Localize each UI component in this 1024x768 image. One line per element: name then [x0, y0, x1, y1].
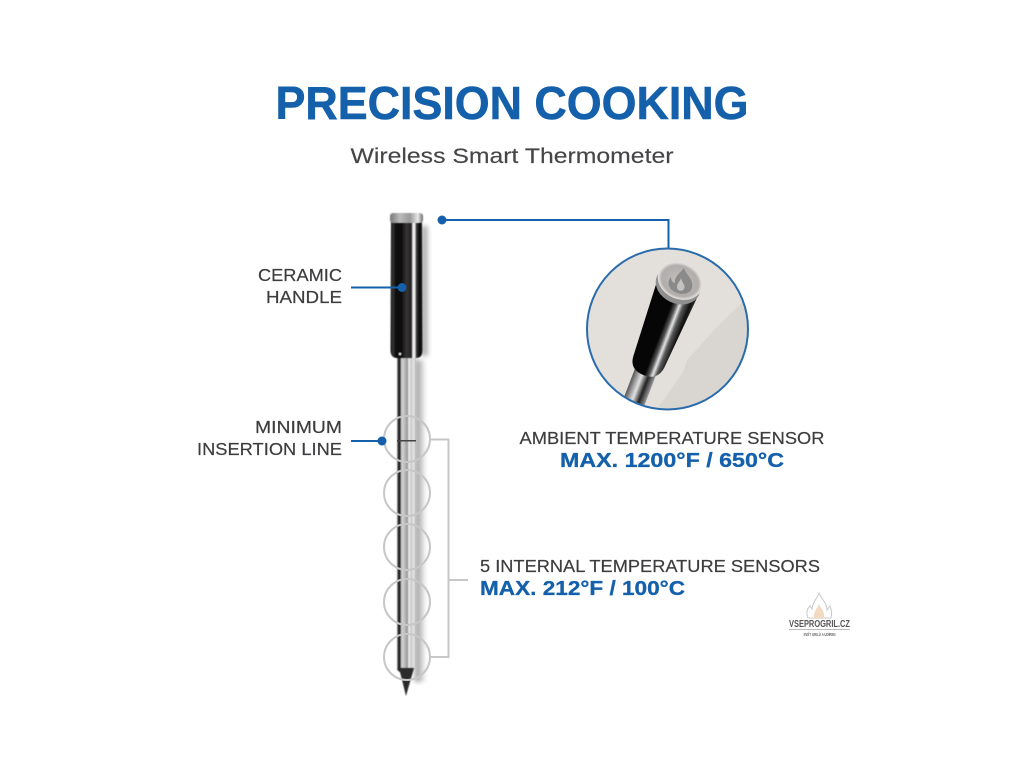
label: internal temperature sensors: 5 INTERNAL TEMPERATURE SENSORS [480, 556, 820, 576]
label: ambient temperature sensor [520, 428, 824, 472]
label: internal temperature sensors [480, 556, 820, 600]
minimum insertion mark [397, 440, 416, 442]
detail cap [650, 255, 708, 311]
label: minimum insertion line: MINIMUM [255, 417, 342, 437]
background surface [658, 302, 747, 408]
handle shadow [421, 226, 428, 356]
probe tip [399, 668, 414, 696]
detail ring [587, 248, 748, 410]
icon: flame core [814, 604, 824, 618]
label: ceramic handle: HANDLE [266, 287, 342, 307]
label: minimum insertion line: INSERTION LINE [197, 439, 342, 459]
handle foot highlight [398, 352, 402, 356]
connector: ambient sensor [438, 216, 668, 249]
title: PRECISION COOKING [276, 79, 748, 130]
label: minimum insertion line [197, 417, 342, 459]
logo tagline: SVĚT GRILŮ A UDÍREN [804, 630, 836, 637]
detail handle [632, 284, 698, 377]
connector: handle [351, 283, 406, 292]
label: internal temperature sensors: MAX. 212°F / 100°C [480, 578, 685, 600]
watermark logo [789, 593, 850, 637]
label: ambient temperature sensor: MAX. 1200°F / 650°C [560, 450, 784, 472]
connector: insertion line [351, 436, 386, 446]
detail probe body [624, 284, 698, 405]
sensor bracket [430, 440, 468, 657]
handle cap [390, 213, 423, 223]
sensor circles [384, 416, 430, 680]
handle [390, 222, 422, 358]
logo name: VSEPROGRIL.CZ [789, 618, 850, 630]
thermometer probe [390, 213, 428, 696]
label: ceramic handle: CERAMIC [258, 265, 342, 285]
label: ambient temperature sensor: AMBIENT TEMPERATURE SENSOR [520, 428, 824, 448]
subtitle: Wireless Smart Thermometer [350, 144, 674, 168]
probe shadow [415, 360, 426, 682]
logo rule [789, 629, 850, 630]
icon: flame [807, 593, 832, 618]
shaft [397, 356, 416, 674]
flame logo [669, 268, 692, 294]
detail shaft [624, 368, 656, 405]
label: ceramic handle [258, 265, 342, 307]
ambient sensor detail circle [586, 248, 749, 410]
